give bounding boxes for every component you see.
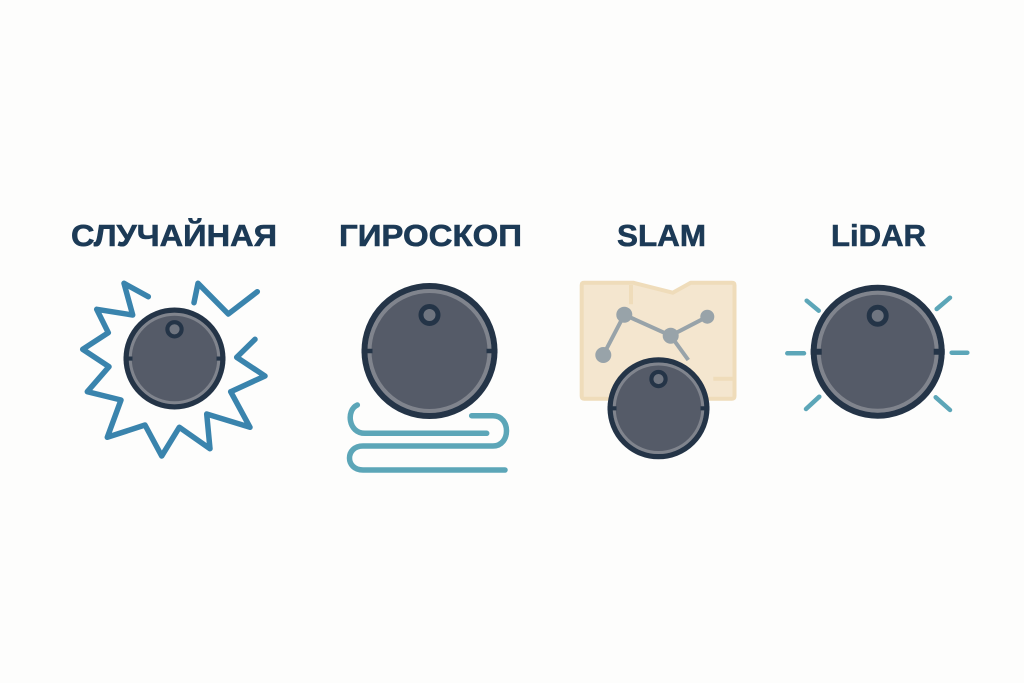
panel: random navigation xyxy=(71,217,277,456)
room map xyxy=(582,283,734,399)
chaotic zigzag path xyxy=(83,283,265,456)
panel: gyroscope navigation xyxy=(339,218,522,470)
icon: robot vacuum xyxy=(811,288,945,416)
icon: robot vacuum xyxy=(608,360,710,457)
graph of map nodes xyxy=(595,307,714,363)
heading: SLAM: SLAM xyxy=(617,218,706,253)
laser rays xyxy=(787,298,967,410)
heading: LiDAR: LiDAR xyxy=(831,218,926,253)
serpentine path xyxy=(350,405,506,470)
panel: SLAM navigation xyxy=(582,218,734,457)
icon: robot vacuum xyxy=(362,286,498,416)
heading: gyroscope: ГИРОСКОП xyxy=(339,218,522,253)
heading: random: СЛУЧАЙНАЯ xyxy=(71,217,277,253)
panel: LiDAR navigation xyxy=(787,218,967,416)
icon: robot vacuum xyxy=(124,310,226,407)
